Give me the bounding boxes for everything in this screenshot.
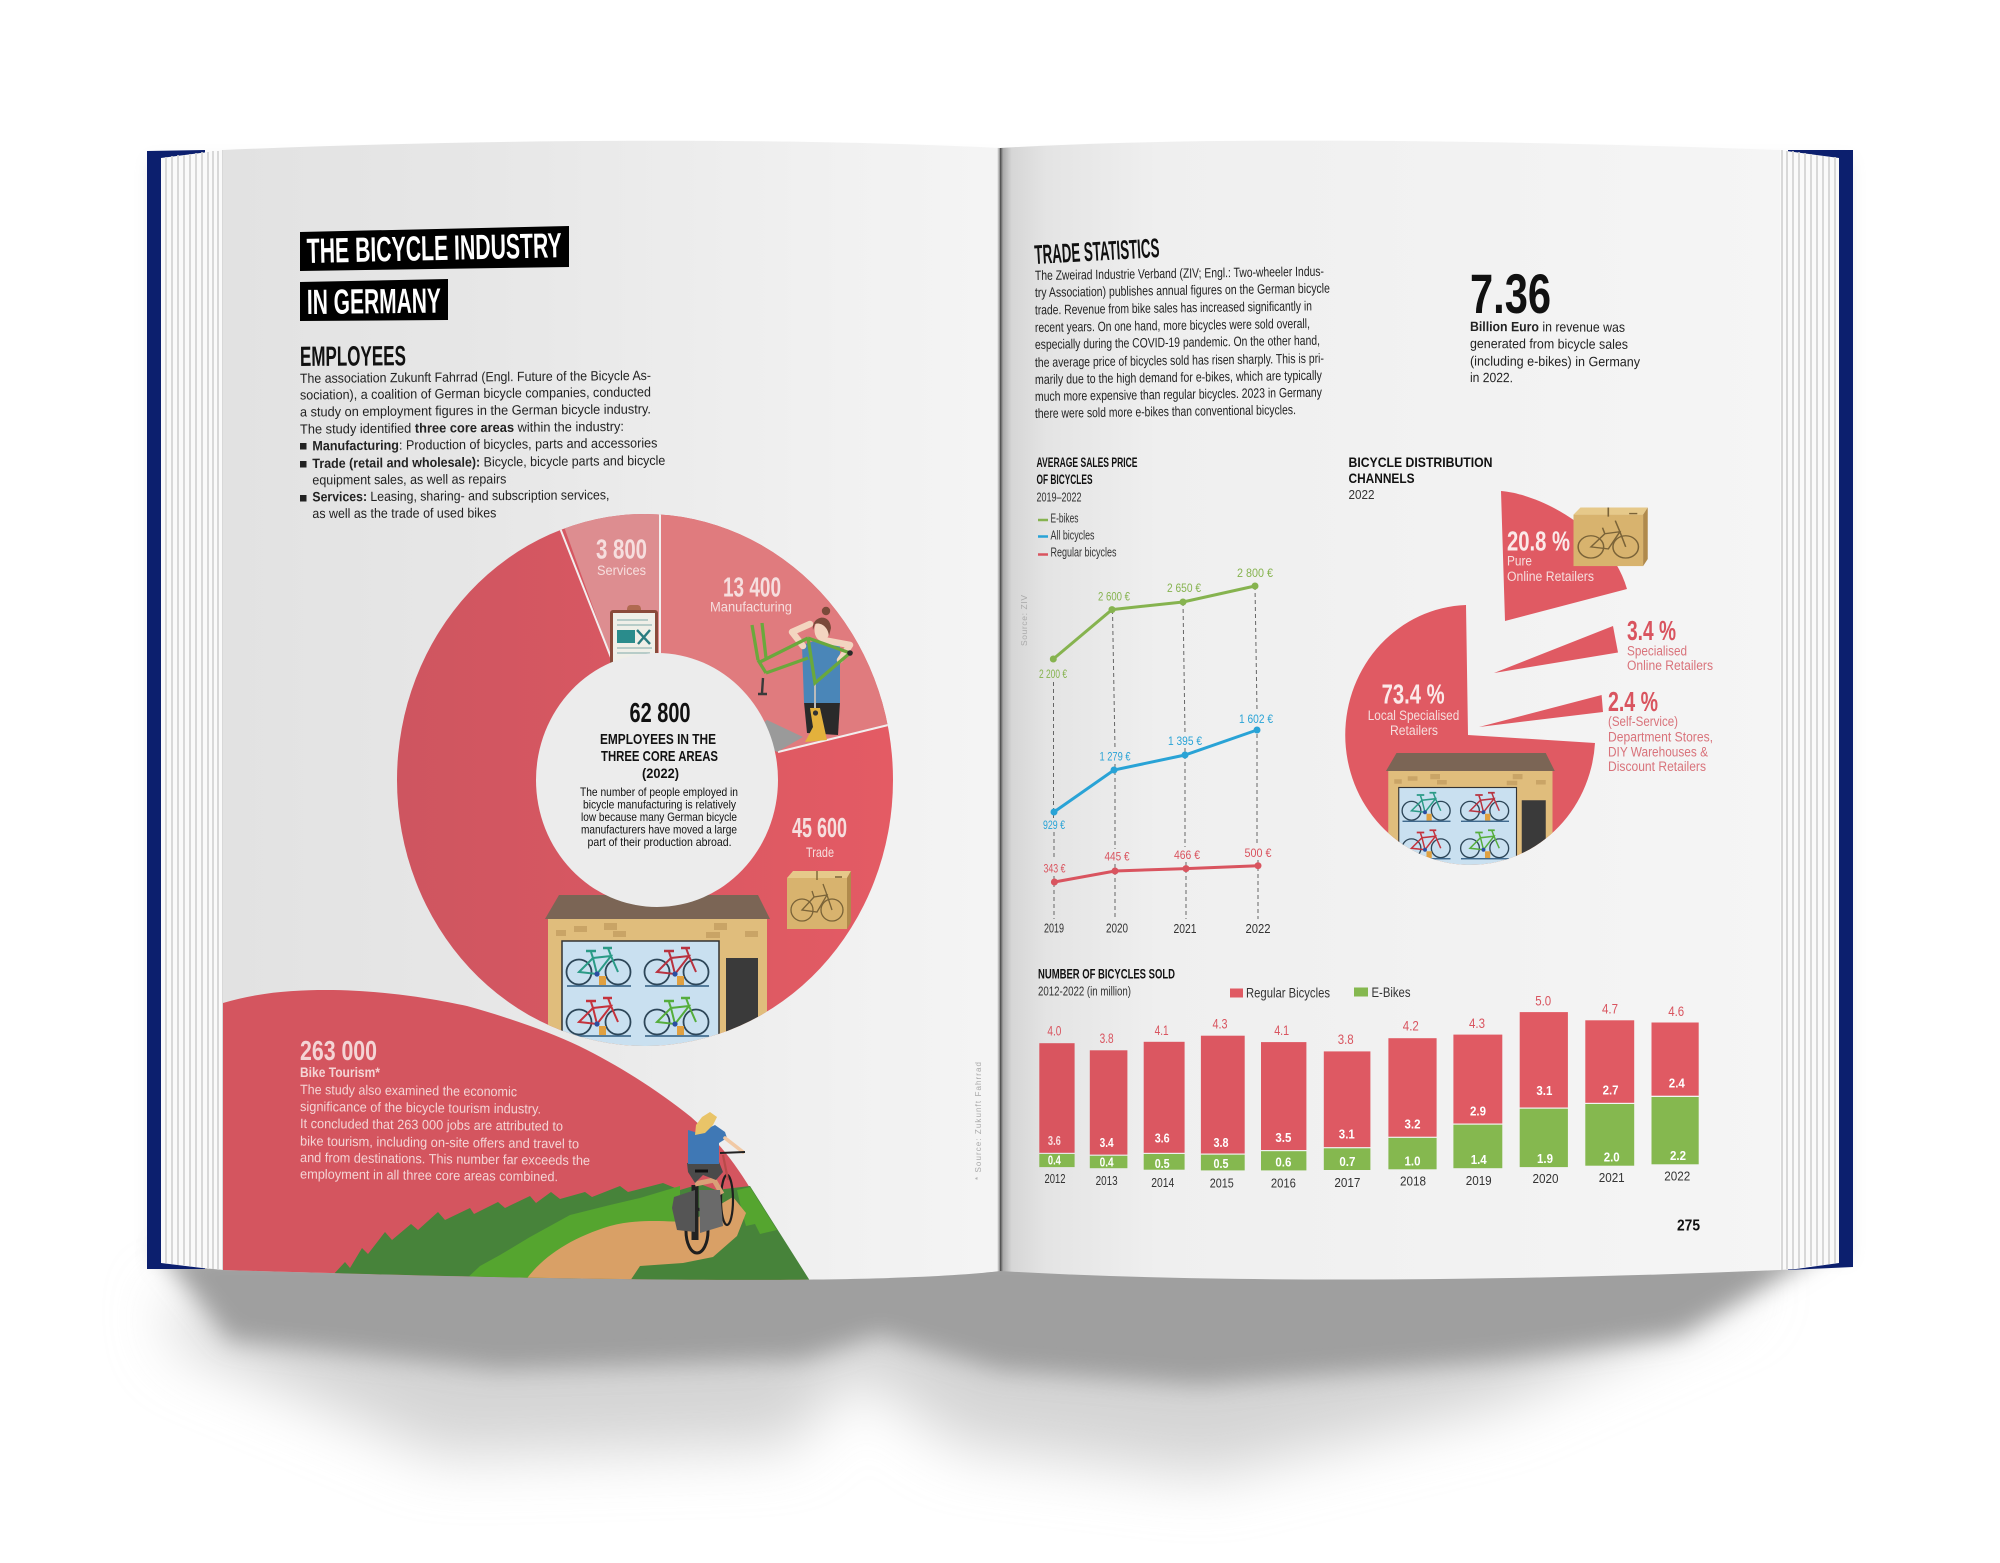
segment: services — [564, 514, 659, 653]
floor shadow — [748, 720, 803, 752]
chart title: 2019–2022 — [1036, 490, 1082, 504]
centre text: total employees: 62 800 — [630, 697, 690, 728]
series: all bicycles: 1 279 € — [1100, 750, 1131, 764]
line chart: average sales price of bicycles — [1036, 455, 1273, 936]
text block: trade statistics: marily due to the high demand for e-bikes, which are typically — [1035, 368, 1322, 387]
page stack right — [1779, 150, 1839, 1270]
icon: person assembling bicycle frame — [752, 607, 853, 742]
text block: trade statistics: The Zweirad Industrie Verband (ZIV; Engl.: Two-wheeler Indus- — [1035, 264, 1324, 283]
slice: department stores and warehouses: (Self-Service) — [1608, 714, 1678, 729]
bar 2014 — [1144, 1023, 1185, 1190]
text block: employees intro and core areas: Manufacturing: Production of bicycles, parts and accessories — [312, 435, 658, 453]
source note: ZIV: Source: ZIV — [1019, 595, 1029, 646]
label: manufacturing: Manufacturing — [710, 598, 792, 614]
text block: bike tourism: 263 000 — [300, 1035, 377, 1066]
slice: specialised online retailers: 3.4 % — [1627, 615, 1676, 646]
segment: trade — [397, 514, 893, 1046]
pie chart: bicycle distribution channels — [1345, 454, 1713, 882]
axis years: 2020 — [1106, 920, 1128, 936]
key figure: 7.36 billion euro — [1470, 262, 1640, 385]
title: IN GERMANY — [307, 282, 441, 322]
bar 2013: 3.4 — [1100, 1136, 1114, 1150]
bar 2020: 2020 — [1532, 1171, 1558, 1186]
label: services: Services — [597, 562, 646, 578]
text block: employees intro and core areas: a study on employment figures in the German bicycle industry. — [300, 401, 651, 419]
text block: bike tourism: The study also examined the economic — [300, 1082, 517, 1099]
bar 2017: 0.7 — [1339, 1155, 1355, 1169]
label: trade — [792, 812, 847, 860]
panel: bike tourism hill — [223, 990, 812, 1292]
series: all bicycles: 929 € — [1043, 818, 1065, 832]
label: services — [596, 534, 647, 578]
bar 2020: 5.0 — [1535, 993, 1551, 1008]
centre text: total employees: manufacturers have moved a large — [581, 822, 737, 836]
bar 2020 — [1520, 993, 1568, 1186]
axis years: 2022 — [1246, 921, 1270, 936]
slice: local specialised retailers: Retailers — [1390, 723, 1438, 738]
bar 2020: 3.1 — [1536, 1084, 1552, 1098]
book shadow — [150, 160, 1850, 1475]
bar chart: number of bicycles sold — [1038, 967, 1699, 1190]
bar 2013 — [1090, 1031, 1127, 1188]
bar 2012: 4.0 — [1047, 1024, 1061, 1039]
label: manufacturing: 13 400 — [723, 572, 781, 602]
slice: specialised online retailers: Online Retailers — [1627, 658, 1713, 673]
bar 2018: 2018 — [1400, 1174, 1426, 1189]
text block: trade statistics: especially during the COVID-19 pandemic. On the other hand, — [1035, 333, 1320, 352]
book cover left — [147, 150, 205, 1269]
legend: E-Bikes — [1372, 985, 1411, 1000]
series: all bicycles: 1 395 € — [1168, 734, 1202, 748]
bar 2019: 4.3 — [1469, 1016, 1485, 1031]
donut hole — [536, 653, 778, 907]
cyclist — [672, 1112, 745, 1253]
series: regular bicycles: 466 € — [1174, 848, 1200, 862]
bar 2013: 2013 — [1096, 1173, 1118, 1188]
right page — [1000, 141, 1780, 1280]
text block: employees intro and core areas: The association Zukunft Fahrrad (Engl. Future of the Bicycle As- — [300, 368, 651, 386]
bar 2017: 3.1 — [1339, 1128, 1355, 1142]
bar 2012: 2012 — [1044, 1171, 1066, 1186]
slice: department stores and warehouses: Department Stores, — [1608, 729, 1713, 744]
bar 2016: 2016 — [1271, 1176, 1296, 1190]
key figure: 7.36 billion euro: Billion Euro in revenue was — [1470, 319, 1625, 335]
text block: bike tourism: significance of the bicycle tourism industry. — [300, 1099, 541, 1117]
centre text: total employees: EMPLOYEES IN THE — [600, 731, 716, 748]
bar 2019: 2019 — [1466, 1173, 1492, 1188]
icon: boxed bicycle — [787, 871, 851, 929]
illustration: bicycle shop — [545, 895, 770, 1046]
bar 2018: 3.2 — [1404, 1118, 1421, 1132]
slice: pure online retailers: Online Retailers — [1507, 569, 1594, 584]
slice: pure online retailers — [1501, 491, 1648, 621]
icon: clipboard — [610, 605, 658, 666]
text block: trade statistics: try Association) publishes annual figures on the German bicycle — [1035, 281, 1330, 300]
label: trade: 45 600 — [792, 812, 847, 843]
bar 2014: 3.6 — [1155, 1131, 1170, 1145]
legend: Regular bicycles — [1050, 546, 1116, 560]
text block: employees intro and core areas: The study identified three core areas within the industry: — [300, 419, 624, 437]
segment: manufacturing — [661, 514, 888, 752]
left page — [223, 141, 1000, 1292]
bar 2019: 2.9 — [1470, 1104, 1486, 1118]
slice: department stores and warehouses: DIY Warehouses & — [1608, 744, 1708, 760]
bar 2016: 0.6 — [1275, 1155, 1291, 1169]
bar 2021: 4.7 — [1602, 1002, 1618, 1016]
bar 2022: 2.2 — [1670, 1149, 1686, 1163]
text block: trade statistics: trade. Revenue from bike sales has increased significantly in — [1035, 298, 1312, 317]
chart title: BICYCLE DISTRIBUTION — [1348, 454, 1492, 470]
bar 2012: 3.6 — [1048, 1134, 1061, 1148]
page number: 275 — [1677, 1218, 1700, 1235]
bar 2021 — [1585, 1002, 1634, 1185]
label: trade: Trade — [806, 844, 834, 860]
bar 2019: 1.4 — [1471, 1153, 1487, 1167]
text block: employees intro and core areas — [300, 368, 665, 521]
text block: employees intro and core areas: Trade (retail and wholesale): Bicycle, bicycle parts and bicycle — [312, 453, 665, 471]
chart title: 2012-2022 (in million) — [1038, 984, 1131, 999]
title — [300, 226, 569, 322]
right page: TRADE STATISTICS — [1034, 233, 1160, 270]
text block: bike tourism: bike tourism, including on-site offers and travel to — [300, 1134, 579, 1151]
bar 2017: 3.8 — [1338, 1032, 1354, 1047]
series: e-bikes: 2 600 € — [1098, 590, 1130, 604]
bar 2016: 4.1 — [1274, 1023, 1289, 1038]
bar 2015: 4.3 — [1212, 1016, 1228, 1032]
slice: local specialised retailers: Local Specialised — [1368, 708, 1459, 723]
bar 2012: 0.4 — [1048, 1153, 1061, 1167]
label: manufacturing — [710, 572, 792, 614]
chart title: NUMBER OF BICYCLES SOLD — [1038, 967, 1175, 982]
slice: pure online retailers: Pure — [1507, 554, 1532, 568]
centre text: total employees: THREE CORE AREAS — [601, 748, 718, 765]
series: all bicycles: 1 602 € — [1239, 712, 1273, 726]
series: e-bikes: 2 650 € — [1167, 581, 1201, 595]
text block: trade statistics: much more expensive than regular bicycles. 2023 in Germany — [1035, 385, 1322, 404]
series: regular bicycles: 343 € — [1044, 862, 1066, 876]
heading: employees: EMPLOYEES — [300, 340, 406, 372]
text block: trade statistics: there were sold more e-bikes than conventional bicycles. — [1035, 402, 1296, 421]
series: e-bikes: 2 800 € — [1237, 566, 1273, 580]
bar 2013: 0.4 — [1100, 1155, 1114, 1169]
centre text: total employees: The number of people employed in — [580, 785, 738, 799]
bar 2015 — [1201, 1016, 1245, 1190]
bar 2022: 2.4 — [1669, 1076, 1685, 1090]
bar 2014: 2014 — [1151, 1175, 1174, 1190]
slice: department stores and warehouses: 2.4 % — [1608, 686, 1658, 717]
text block: trade statistics: recent years. On one hand, more bicycles were sold overall, — [1035, 316, 1310, 335]
book cover right — [1788, 150, 1853, 1270]
label: services: 3 800 — [596, 534, 647, 564]
bar 2022: 2022 — [1664, 1168, 1690, 1183]
light grass right — [737, 1187, 777, 1234]
slice: pure online retailers: 20.8 % — [1507, 526, 1570, 556]
bar 2015: 0.5 — [1214, 1157, 1229, 1171]
slice: specialised online retailers — [1494, 615, 1713, 673]
text block: bike tourism: and from destinations. This number far exceeds the — [300, 1150, 590, 1168]
series: regular bicycles: 445 € — [1104, 850, 1130, 864]
centre text: total employees — [580, 697, 738, 849]
bar 2014: 4.1 — [1155, 1023, 1169, 1038]
centre text: total employees: low because many German bicycle — [581, 810, 737, 824]
bar 2016: 3.5 — [1275, 1131, 1291, 1145]
axis years: 2021 — [1174, 921, 1196, 936]
text block: trade statistics: the average price of bicycles sold has risen sharply. This is pri- — [1035, 351, 1324, 370]
bar 2016 — [1261, 1023, 1306, 1190]
text block: employees intro and core areas: as well as the trade of used bikes — [312, 505, 497, 521]
bar 2019 — [1453, 1016, 1502, 1188]
key figure: 7.36 billion euro: 7.36 — [1470, 262, 1551, 325]
key figure: 7.36 billion euro: in 2022. — [1470, 370, 1513, 385]
bar 2014: 0.5 — [1155, 1157, 1170, 1171]
text block: trade statistics — [1035, 264, 1330, 421]
text block: bike tourism: Bike Tourism* — [300, 1064, 380, 1080]
chart title: OF BICYCLES — [1036, 472, 1092, 487]
series: all bicycles — [1043, 712, 1273, 832]
chart title: 2022 — [1348, 487, 1374, 502]
bar 2021: 2021 — [1599, 1170, 1625, 1185]
source note: Zukunft Fahrrad: * Source: Zukunft Fahrrad — [974, 1062, 983, 1180]
legend: E-bikes — [1050, 512, 1078, 526]
grass — [334, 1183, 810, 1280]
axis years — [1044, 920, 1270, 936]
bar 2017: 2017 — [1334, 1175, 1360, 1190]
bar 2013: 3.8 — [1100, 1031, 1114, 1046]
text block: bike tourism: employment in all three core areas combined. — [300, 1167, 558, 1184]
chart title — [1036, 455, 1138, 504]
bar 2015: 3.8 — [1214, 1136, 1229, 1150]
slice: local specialised retailers: 73.4 % — [1382, 678, 1445, 710]
chart title — [1038, 967, 1175, 999]
bar 2018: 1.0 — [1404, 1154, 1421, 1168]
key figure: 7.36 billion euro: (including e-bikes) in Germany — [1470, 354, 1640, 369]
series: regular bicycles — [1044, 846, 1272, 886]
bar 2020: 1.9 — [1537, 1152, 1553, 1166]
bar 2022: 4.6 — [1668, 1004, 1684, 1019]
bar 2018: 4.2 — [1403, 1019, 1419, 1034]
bar 2022 — [1652, 1004, 1699, 1183]
donut chart: employees by core area — [397, 514, 893, 1046]
title: THE BICYCLE INDUSTRY — [306, 226, 562, 271]
page stack left — [161, 150, 224, 1270]
slice: department stores and warehouses: Discount Retailers — [1608, 759, 1706, 774]
bar 2012 — [1039, 1024, 1075, 1186]
slice: specialised online retailers: Specialised — [1627, 644, 1687, 659]
series: e-bikes: 2 200 € — [1039, 667, 1067, 681]
legend: All bicycles — [1050, 528, 1094, 542]
text block: bike tourism: It concluded that 263 000 jobs are attributed to — [300, 1116, 563, 1134]
legend — [1230, 985, 1411, 1000]
text block: employees intro and core areas: equipment sales, as well as repairs — [312, 471, 507, 487]
series: regular bicycles: 500 € — [1244, 846, 1272, 860]
light grass — [463, 1186, 680, 1284]
bar 2021: 2.0 — [1604, 1150, 1620, 1164]
segment dividers — [560, 514, 888, 753]
legend: Regular Bicycles — [1246, 986, 1330, 1000]
chart title: CHANNELS — [1348, 470, 1414, 486]
centre text: total employees: (2022) — [642, 765, 679, 781]
chart title: AVERAGE SALES PRICE — [1036, 455, 1138, 470]
dirt path — [523, 1197, 746, 1284]
key figure: 7.36 billion euro: generated from bicycle sales — [1470, 336, 1628, 352]
centre text: total employees: part of their production abroad. — [588, 835, 732, 849]
series: e-bikes — [1039, 566, 1273, 681]
bar 2021: 2.7 — [1603, 1084, 1619, 1098]
axis years: 2019 — [1044, 920, 1064, 936]
slice: department stores and warehouses — [1479, 686, 1713, 774]
bar 2015: 2015 — [1210, 1176, 1234, 1190]
centre text: total employees: bicycle manufacturing is relatively — [583, 798, 736, 812]
open book spread — [145, 140, 1853, 1496]
bar 2018 — [1388, 1019, 1437, 1189]
legend — [1038, 512, 1116, 560]
slice: local specialised retailers — [1345, 605, 1595, 882]
text block: employees intro and core areas: sociation), a coalition of German bicycle companies, conducted — [300, 384, 651, 402]
chart title — [1348, 454, 1492, 502]
text block: bike tourism — [300, 1035, 590, 1184]
bar 2017 — [1324, 1032, 1370, 1190]
text block: employees intro and core areas: Services: Leasing, sharing- and subscription services, — [312, 487, 609, 504]
